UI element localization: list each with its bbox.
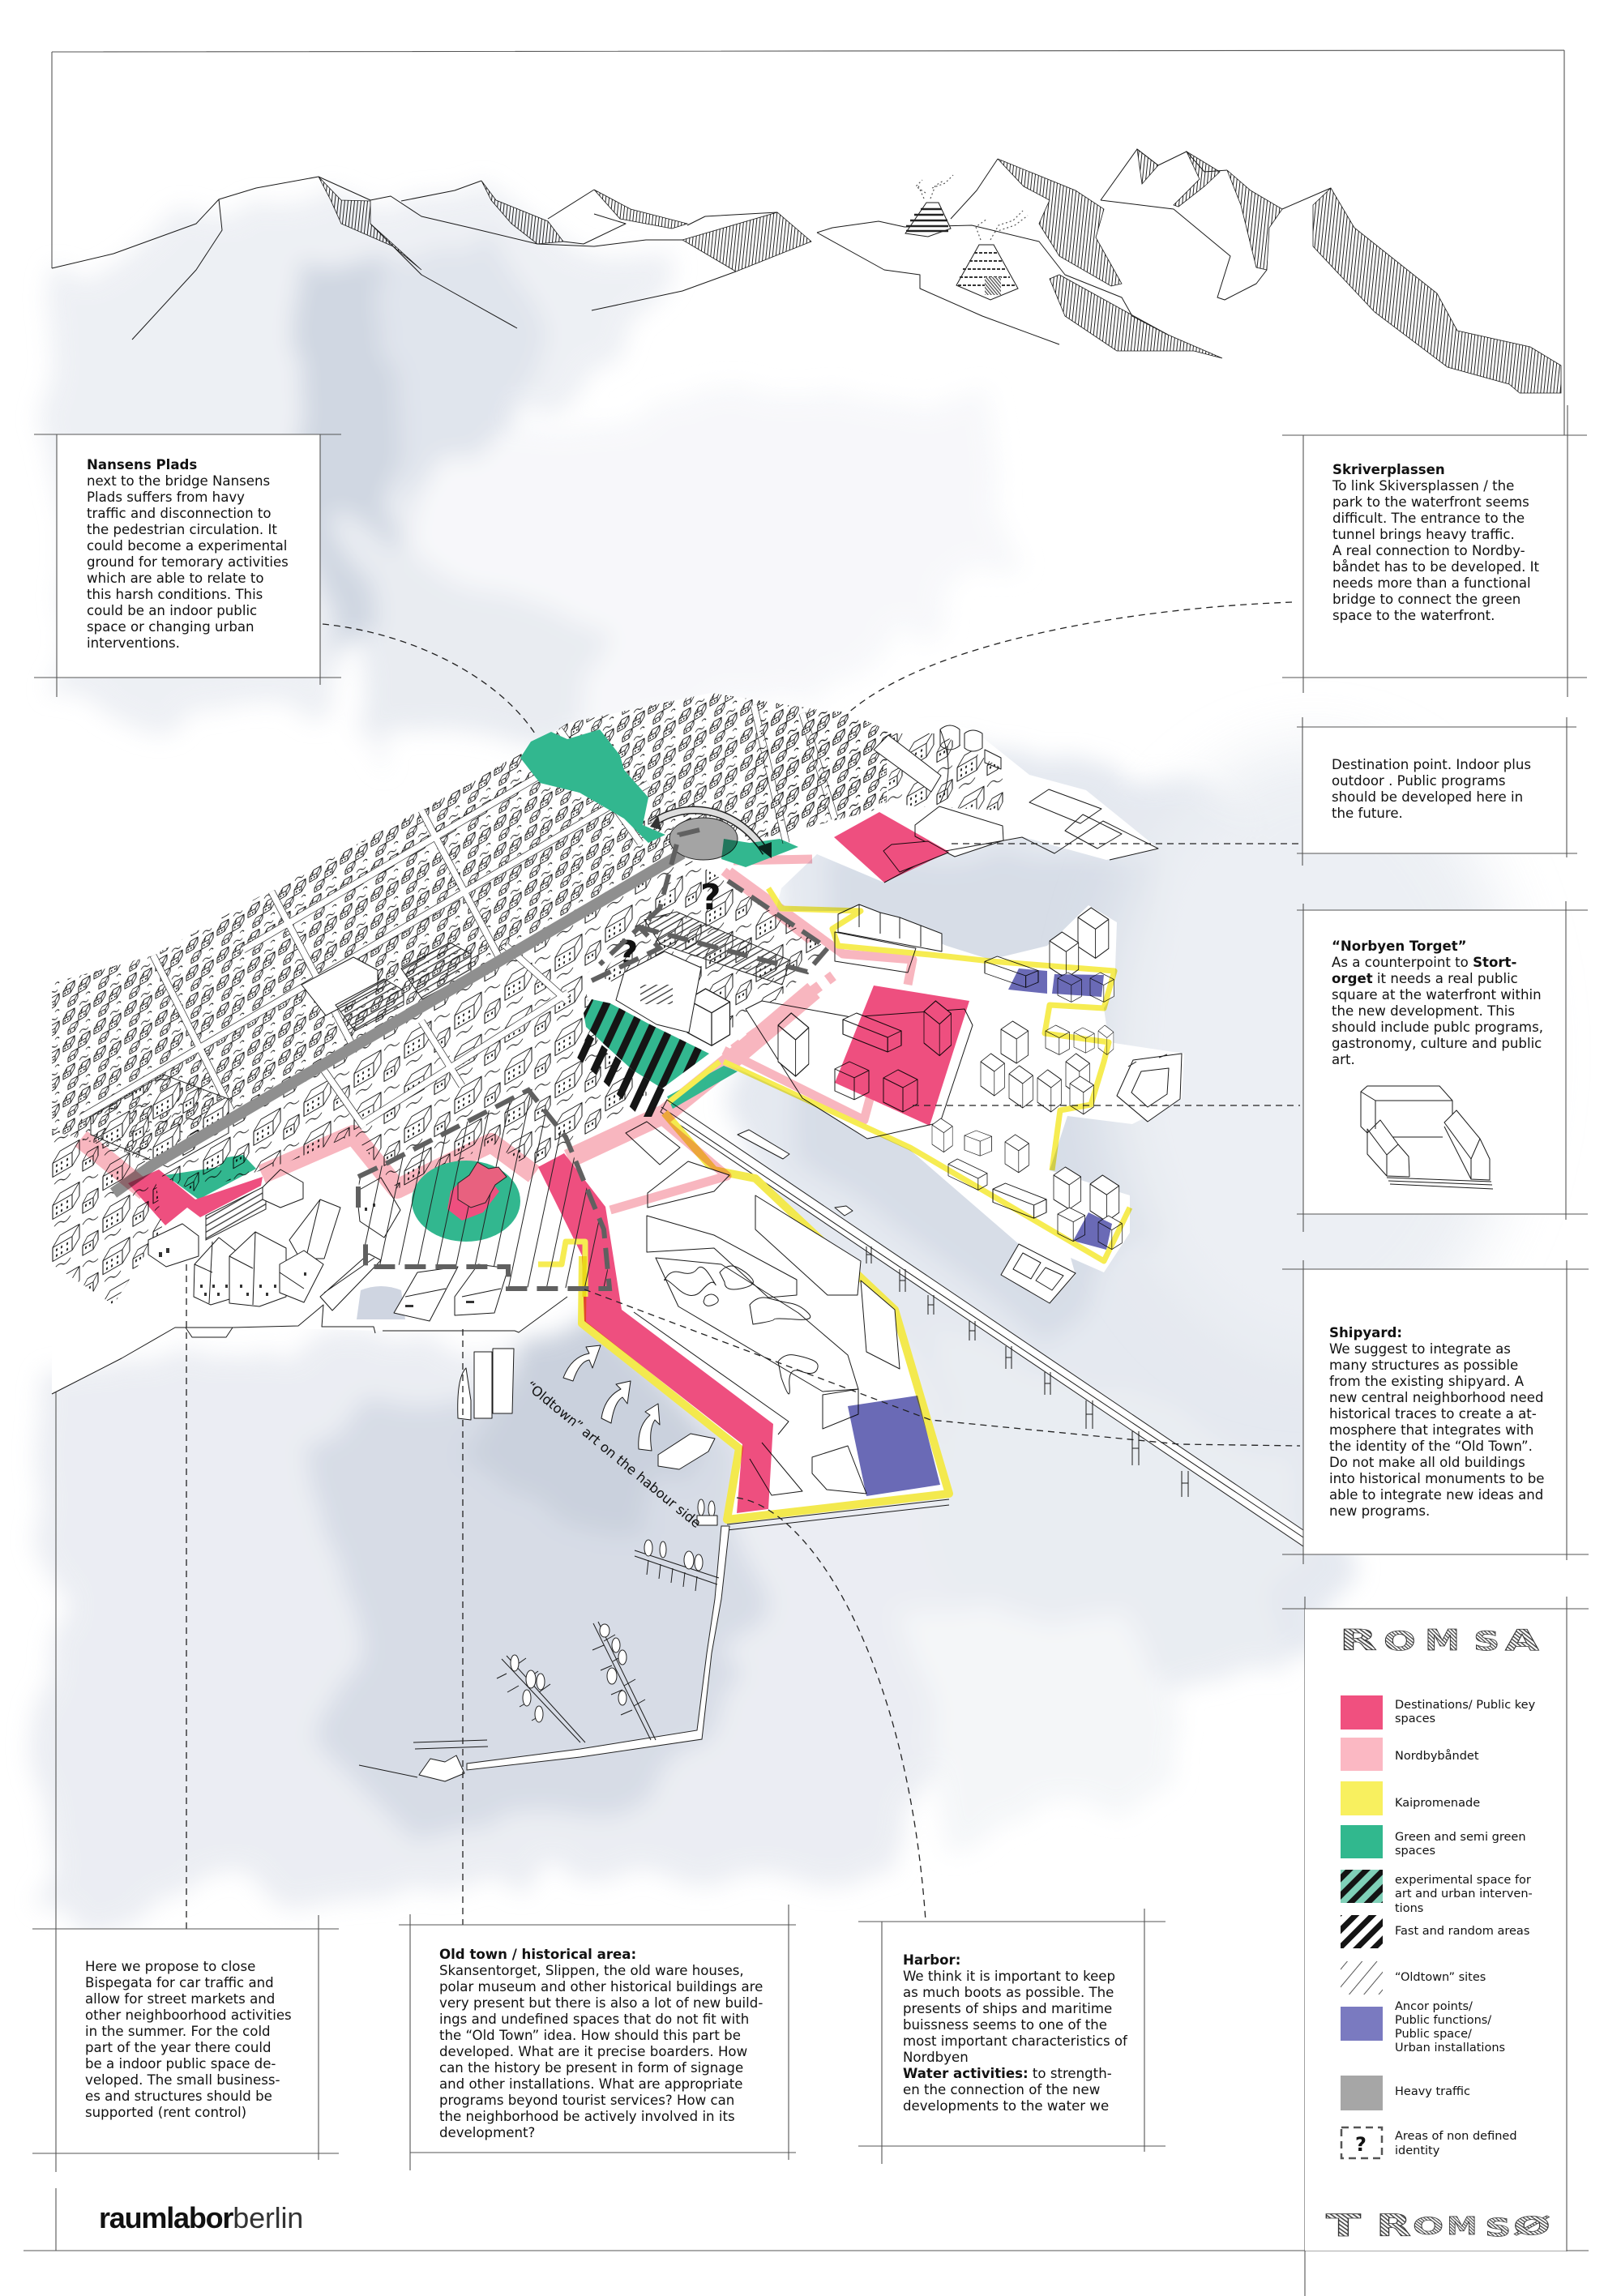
panel: Old town / historical area: ings and undefined spaces that do not fit with <box>439 2012 749 2027</box>
legend: green <box>1341 1825 1526 1858</box>
panel: Bispegata proposal: part of the year there could <box>85 2040 271 2055</box>
panel: Bispegata proposal: veloped. The small business- <box>85 2072 280 2088</box>
streets of the north district <box>81 705 835 1118</box>
panel: Skriverplassen: båndet has to be developed. It <box>1332 559 1540 575</box>
legend: experimental: experimental space for <box>1395 1874 1531 1887</box>
panel: Shipyard: We suggest to integrate as <box>1329 1341 1511 1357</box>
legend: oldtown <box>1341 1961 1486 1995</box>
icon: courtyard building sketch <box>1361 1086 1493 1189</box>
panel: Harbor: presents of ships and maritime <box>903 2001 1112 2016</box>
panel: Skriverplassen: needs more than a functional <box>1332 575 1531 591</box>
destinations dark pink areas <box>128 812 969 1513</box>
panel: destination point: should be developed here in <box>1332 789 1523 805</box>
panel: Bispegata proposal: es and structures should be <box>85 2089 272 2104</box>
logo: TROMSO hatched lettering: M <box>1447 2212 1478 2241</box>
heavy traffic road <box>113 810 772 1193</box>
mountain range illustration <box>52 149 1561 393</box>
legend: fast and random <box>1341 1915 1529 1948</box>
logo: ROMSA hatched lettering: S <box>1473 1627 1499 1657</box>
apartment blocks <box>302 957 378 1015</box>
panel: Norbyen Torget: the new development. This <box>1332 1003 1515 1019</box>
legend: Kaipromenade <box>1341 1781 1480 1815</box>
coloured zones overlay <box>81 729 1130 1513</box>
panel: Harbor: most important characteristics of <box>903 2033 1128 2049</box>
panel: destination point: the future. <box>1332 806 1403 821</box>
legend: oldtown: “Oldtown” sites <box>1395 1971 1486 1984</box>
central development buildings <box>600 859 827 1045</box>
legend: anchor points: Public space/ <box>1395 2028 1472 2041</box>
panel: Old town / historical area: polar museum and other historical buildings are <box>439 1979 763 1995</box>
panel: Skriverplassen: park to the waterfront seems <box>1332 494 1529 510</box>
panel: Harbor: buissness seems to one of the <box>903 2017 1107 2033</box>
anchor points purple <box>848 968 1112 1496</box>
legend: destinations <box>1341 1695 1536 1729</box>
logo: raumlaborberlin: raumlaborberlin <box>99 2201 303 2234</box>
panel: Harbor: Harbor: <box>903 1952 960 1968</box>
panel: Shipyard: historical traces to create a at- <box>1329 1406 1537 1422</box>
legend: undefined identity <box>1341 2127 1517 2158</box>
panel: Old town / historical area: programs beyond tourist services? How can <box>439 2093 734 2108</box>
legend: Kaipromenade: Kaipromenade <box>1395 1797 1480 1810</box>
oldtown art arrows on the water <box>563 1345 715 1469</box>
legend: undefined identity: identity <box>1395 2144 1440 2157</box>
fort-shaped block <box>1117 1054 1182 1122</box>
legend: undefined identity: ? <box>1355 2133 1367 2156</box>
panel: Bispegata proposal <box>32 1915 339 2172</box>
panel: Shipyard: new programs. <box>1329 1503 1430 1519</box>
panel: Nansens Plads: the pedestrian circulation. It <box>87 522 277 537</box>
north-east districts and industry <box>754 712 1158 883</box>
panel: Nansens Plads: traffic and disconnection to <box>87 506 272 521</box>
panel: Nansens Plads: interventions. <box>87 635 180 651</box>
panel: Shipyard: many structures as possible <box>1329 1358 1518 1373</box>
panel: Norbyen Torget: square at the waterfront within <box>1332 987 1542 1003</box>
legend: anchor points <box>1341 2000 1505 2054</box>
pink listed houses in the green circle <box>458 1162 507 1208</box>
panel: Bispegata proposal: supported (rent control) <box>85 2105 246 2120</box>
legend: Nordbybandet <box>1341 1738 1479 1771</box>
panel: Old town / historical area: can the history be present in form of signage <box>439 2060 743 2076</box>
panel: Norbyen Torget <box>1297 901 1588 1232</box>
green spaces <box>165 729 798 1242</box>
panel: Shipyard: Do not make all old buildings <box>1329 1455 1525 1470</box>
panel: Skriverplassen: bridge to connect the green <box>1332 592 1520 607</box>
panel: Harbor: Nordbyen <box>903 2050 969 2065</box>
kaipromenade yellow lines <box>538 888 1130 1297</box>
panel: Skriverplassen: A real connection to Nordby- <box>1332 543 1525 558</box>
panel: Shipyard <box>1282 1260 1589 1564</box>
panel: Harbor: developments to the water we <box>903 2098 1109 2114</box>
legend: anchor points: Ancor points/ <box>1395 2000 1473 2013</box>
panel: Skriverplassen: tunnel brings heavy traffic. <box>1332 527 1515 542</box>
panel: destination point <box>1297 717 1577 866</box>
Nordbybandet light pink routes <box>81 990 814 1191</box>
legend: fast and random: Fast and random areas <box>1395 1925 1529 1938</box>
legend: anchor points: Public functions/ <box>1395 2014 1491 2027</box>
logo: TROMSO hatched lettering: R <box>1376 2208 1411 2244</box>
panel: Bispegata proposal: other neighboorhood activities <box>85 2007 292 2023</box>
big slab building <box>91 1075 229 1167</box>
dock cross bars <box>497 1560 697 1721</box>
logo: TROMSO hatched lettering <box>1326 2208 1550 2244</box>
panel: Bispegata proposal: in the summer. For the cold <box>85 2024 271 2039</box>
lower dock block <box>1001 1244 1076 1303</box>
legend: destinations: spaces <box>1395 1712 1435 1725</box>
legend: destinations: Destinations/ Public key <box>1395 1699 1536 1712</box>
white bases under solid green areas <box>412 729 665 1242</box>
panel: Shipyard: into historical monuments to be <box>1329 1471 1544 1486</box>
question mark 2: ? <box>618 934 639 975</box>
panel: Norbyen Torget: should include publc programs, <box>1332 1020 1543 1035</box>
roundabout and arc arrow <box>650 810 772 860</box>
panel: Nansens Plads: space or changing urban <box>87 619 254 635</box>
legend: anchor points: Urban installations <box>1395 2042 1505 2054</box>
panel: Harbor: as much boots as possible. The <box>903 1985 1114 2000</box>
panel: Old town / historical area: Skansentorget, Slippen, the old ware houses, <box>439 1963 744 1978</box>
quay line and old boat <box>52 1297 567 1394</box>
panel: Bispegata proposal: Here we propose to close <box>85 1959 255 1974</box>
logo: ROMSA hatched lettering <box>1340 1623 1539 1657</box>
panel: Harbor: Water activities: to strength- <box>903 2066 1112 2081</box>
panel: Norbyen Torget: “Norbyen Torget” <box>1332 938 1467 954</box>
panel: Shipyard: able to integrate new ideas and <box>1329 1487 1543 1503</box>
question mark 1: ? <box>700 877 721 918</box>
panel: Nansens Plads: Nansens Plads <box>87 457 197 472</box>
logo: TROMSO hatched lettering: T <box>1326 2208 1362 2243</box>
label: Oldtown art on the habour side: “Oldtown” art on the habour side <box>523 1378 704 1531</box>
icon: small tipi with smoke <box>905 175 953 237</box>
panel: Nansens Plads: ground for temorary activities <box>87 554 289 570</box>
panel: Skriverplassen: space to the waterfront. <box>1332 608 1495 623</box>
pink site building <box>883 841 948 872</box>
panel: Skriverplassen: difficult. The entrance to the <box>1332 511 1525 526</box>
panel: Bispegata proposal: Bispegata for car traffic and <box>85 1975 274 1990</box>
panel: Norbyen Torget: orget it needs a real public <box>1332 971 1518 986</box>
panel: Old town / historical area: the “Old Town” idea. How should this part be <box>439 2028 741 2043</box>
panel: Nansens Plads <box>34 434 341 697</box>
logo: ROMSA hatched lettering: M <box>1425 1623 1460 1657</box>
legend: green: spaces <box>1395 1845 1435 1858</box>
panel: Old town / historical area: very present but there is also a lot of new build- <box>439 1995 763 2011</box>
dashed connector lines <box>186 602 1300 1929</box>
panel: Nansens Plads: could be an indoor public <box>87 603 257 618</box>
fast and random stripes on white <box>577 1033 673 1117</box>
land base of the city map <box>52 693 1184 1394</box>
panel: destination point: outdoor . Public programs <box>1332 773 1506 789</box>
panel: Shipyard: new central neighborhood need <box>1329 1390 1544 1405</box>
panel: Old town / historical area: development? <box>439 2125 535 2140</box>
logo: ROMSA hatched lettering: A <box>1505 1623 1539 1657</box>
legend: green: Green and semi green <box>1395 1831 1526 1844</box>
panel: Skriverplassen <box>1282 405 1587 697</box>
experimental space blob with stripes <box>577 999 709 1117</box>
logo: ROMSA hatched lettering: R <box>1340 1623 1377 1657</box>
long factory halls <box>874 735 1122 857</box>
panel: Shipyard: from the existing shipyard. A <box>1329 1374 1525 1389</box>
upper promenade development <box>746 904 1182 1303</box>
legend: experimental: tions <box>1395 1902 1423 1915</box>
panel: Old town / historical area: Old town / historical area: <box>439 1947 636 1962</box>
panel: Old town / historical area: the neighborhood be actively involved in its <box>439 2109 735 2124</box>
panel: Harbor: en the connection of the new <box>903 2082 1100 2097</box>
logo: ROMSA hatched lettering: O <box>1384 1627 1416 1657</box>
ridge lines <box>52 149 1331 344</box>
panel: destination point: Destination point. Indoor plus <box>1332 757 1531 772</box>
legend: Nordbybandet: Nordbybåndet <box>1395 1749 1479 1763</box>
panel: Norbyen Torget: As a counterpoint to Stort- <box>1332 955 1516 970</box>
hatched mountain faces <box>319 149 1561 393</box>
panel: Harbor: We think it is important to keep <box>903 1969 1115 1984</box>
undefined identity dashed outlines <box>358 830 828 1289</box>
legend: heavy traffic <box>1341 2076 1470 2110</box>
legend: heavy traffic: Heavy traffic <box>1395 2085 1470 2098</box>
panel: Bispegata proposal: allow for street markets and <box>85 1991 275 2007</box>
panel: Nansens Plads: could become a experimental <box>87 538 287 554</box>
panel: Harbor <box>858 1909 1165 2164</box>
south town district <box>52 859 682 1305</box>
shipyard tree clusters <box>665 1266 818 1394</box>
panel: Nansens Plads: this harsh conditions. This <box>87 587 263 602</box>
panel: Nansens Plads: which are able to relate to <box>87 571 264 586</box>
north town district: dense houses <box>52 693 892 1165</box>
industrial yard and tanks <box>940 725 1001 802</box>
panel: Shipyard: the identity of the “Old Town”. <box>1329 1439 1533 1454</box>
small boats <box>511 1499 715 1722</box>
logo: TROMSO hatched lettering: Ø <box>1513 2212 1550 2241</box>
panel: Bispegata proposal: be a indoor public space de- <box>85 2056 276 2072</box>
panel: legend <box>1282 1597 1589 2251</box>
moored ships <box>458 1349 514 1420</box>
panel: Nansens Plads: Plads suffers from havy <box>87 490 245 505</box>
panel: Old town / historical area: developed. What are it precise boarders. How <box>439 2044 747 2059</box>
panel: Nansens Plads: next to the bridge Nansens <box>87 473 270 489</box>
panel: Old town / historical area <box>399 1905 796 2170</box>
panel: Shipyard: Shipyard: <box>1329 1325 1402 1340</box>
icon: large tipi with smoke <box>956 211 1028 300</box>
harbour breakwater with docks and boats <box>359 1499 729 1781</box>
legend: experimental <box>1341 1870 1533 1915</box>
background watercolour wash <box>41 182 1524 1913</box>
panel: Shipyard: mosphere that integrates with <box>1329 1422 1533 1438</box>
logo: TROMSO hatched lettering: O <box>1413 2213 1444 2240</box>
old town waterfront warehouses <box>52 1169 567 1420</box>
shipyard peninsula <box>582 1113 949 1530</box>
shipyard building outlines <box>626 1122 900 1495</box>
legend: undefined identity: Areas of non defined <box>1395 2130 1517 2143</box>
panel: Old town / historical area: and other installations. What are appropriate <box>439 2076 742 2092</box>
legend: experimental: art and urban interven- <box>1395 1888 1533 1901</box>
panel: Skriverplassen: Skriverplassen <box>1332 462 1445 477</box>
panel: Skriverplassen: To link Skiversplassen / the <box>1332 478 1514 494</box>
logo: TROMSO hatched lettering: S <box>1485 2213 1511 2243</box>
bridge with pylons <box>661 1100 1303 1546</box>
oldtown hatch lines <box>358 1090 609 1289</box>
panel: Norbyen Torget: art. <box>1332 1052 1355 1067</box>
panel: Norbyen Torget: gastronomy, culture and public <box>1332 1036 1542 1051</box>
